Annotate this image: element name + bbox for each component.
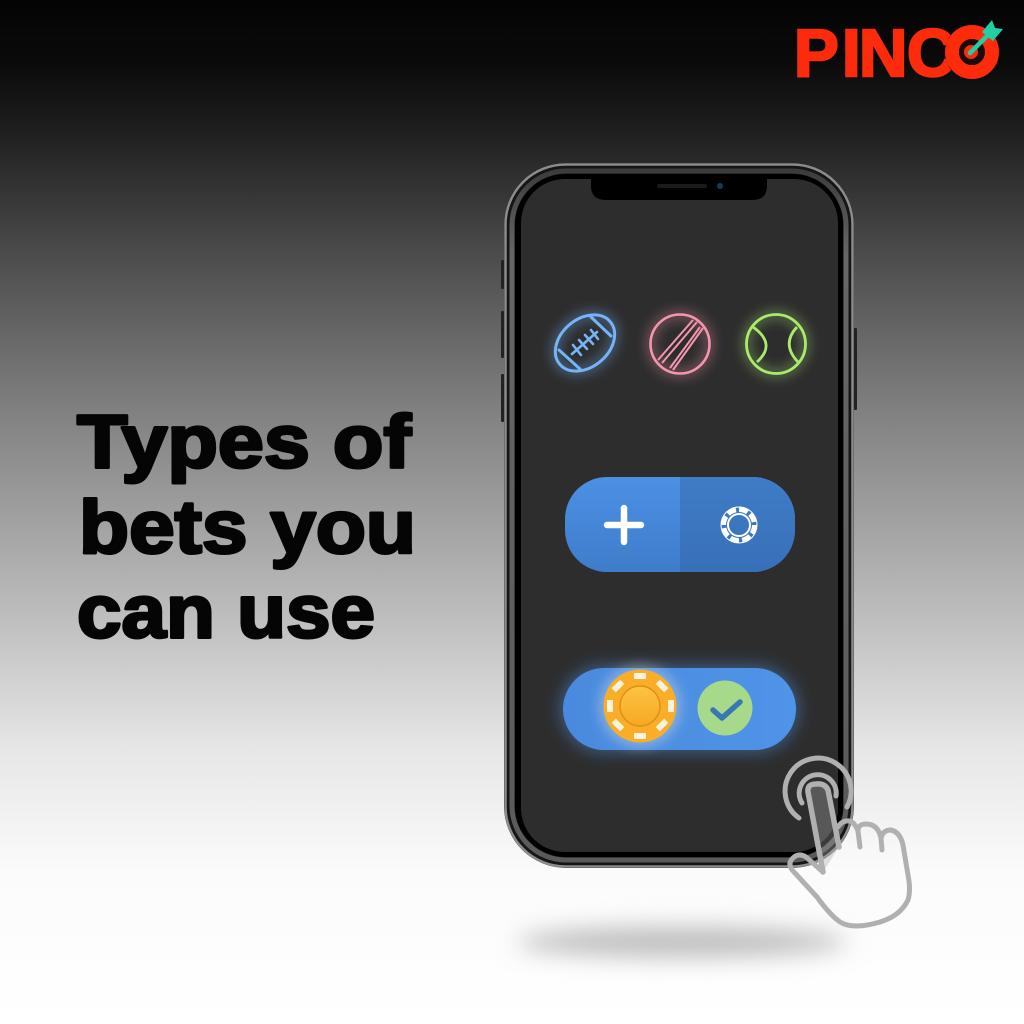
logo: PINCO: PINC <box>794 16 955 91</box>
title: Types of <box>77 400 412 484</box>
logo: PINCO: O <box>946 20 993 87</box>
icon: target and arrow <box>959 20 1003 65</box>
title: bets you <box>79 485 416 569</box>
icon: american football <box>544 303 626 383</box>
tap rings <box>785 758 851 818</box>
title: can use <box>77 570 375 654</box>
side buttons <box>501 260 857 422</box>
icon: cricket ball <box>650 314 710 374</box>
pointing finger <box>808 784 839 872</box>
add-bet pill <box>565 477 795 572</box>
notch <box>591 178 767 200</box>
icon: small chip <box>721 507 757 543</box>
confirm pill <box>560 665 799 753</box>
icon: tapping hand <box>785 758 910 926</box>
icon: green check <box>698 680 752 736</box>
icon: gold chip <box>599 665 681 747</box>
phone body <box>504 163 854 868</box>
title <box>77 400 416 654</box>
icon: plus <box>607 508 641 542</box>
screen <box>521 179 838 852</box>
ground shadow <box>517 927 847 957</box>
phone <box>501 163 857 868</box>
hand outline <box>790 821 910 926</box>
icon: tennis ball <box>746 314 806 374</box>
